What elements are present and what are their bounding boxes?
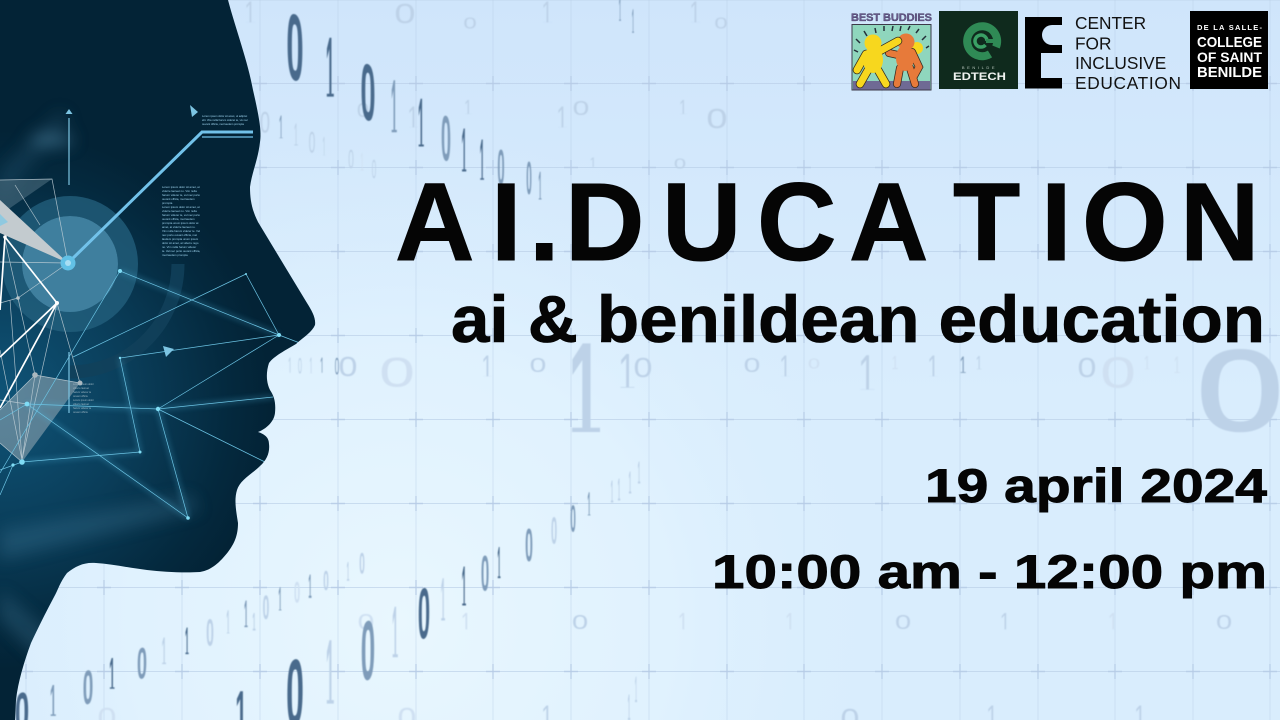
tiny text column: no. Vim nulla harum viderer	[162, 245, 196, 249]
wordmark: INCLUSIVE	[1075, 53, 1166, 73]
wordmark	[1075, 13, 1181, 93]
upper binary stream: 1	[632, 2, 634, 44]
faint background digits: 1	[976, 352, 982, 375]
upper binary stream: 1	[461, 113, 467, 192]
logo: Best Buddies	[851, 12, 932, 90]
faint background digits: 1	[1000, 607, 1010, 637]
tiny text column: harum viderer te, vel nec porto	[162, 213, 200, 217]
faint background digits: 0	[573, 98, 589, 120]
footer strip	[853, 81, 930, 90]
hugging hand	[911, 42, 923, 54]
faint background digits: 0	[358, 610, 374, 635]
wordmark: EDUCATION	[1075, 73, 1181, 93]
faint background digits: 0	[634, 352, 652, 383]
lower binary stream: 1	[308, 569, 312, 608]
thin white network	[0, 179, 80, 462]
faint background digits: 0	[674, 155, 686, 171]
lower binary stream: 0	[206, 612, 214, 655]
date: 19 april 2024	[925, 459, 1267, 512]
lower binary stream: 1	[635, 669, 637, 714]
tiny text column: met laudem prompta	[162, 253, 188, 257]
title: AI.DUCATION	[395, 161, 1259, 284]
lower binary stream: 1	[252, 608, 256, 638]
tiny text column: te. Vel nec porto ouvant officia,	[162, 249, 200, 253]
upper binary stream: 0	[441, 102, 451, 177]
lower binary stream: 0	[359, 547, 365, 580]
faint background digits: 0	[348, 146, 354, 175]
orange figure	[889, 34, 919, 84]
wordmark: BENILDE	[1197, 64, 1262, 81]
faint background digits: 1	[1174, 352, 1180, 380]
blue network glow	[22, 271, 279, 518]
tiny text column: viderre laoreet no. Vim nulla	[162, 189, 197, 193]
faint background digits: 0	[372, 156, 376, 185]
faint background digits: 0	[463, 15, 477, 33]
lower binary stream: 0	[418, 573, 430, 656]
tiny text column: amet, at viderre laoreet no.	[162, 225, 196, 229]
lower binary stream: 0	[83, 659, 93, 716]
network nodes	[3, 235, 281, 520]
upper binary stream: 1	[391, 63, 397, 157]
tiny text column: dolor sit amet, at viderre rego	[162, 241, 199, 245]
faint background digits: 1	[360, 148, 364, 178]
small label: BENILDE	[962, 65, 997, 70]
blue network detail	[0, 271, 305, 518]
faint background digits: 1	[288, 352, 292, 380]
lower binary stream: 1	[618, 473, 620, 510]
lower binary stream: 0	[323, 566, 329, 596]
lower binary stream: 0	[263, 590, 269, 627]
grey polygon facets	[0, 179, 80, 462]
tiny grey caption: ouvant officia	[73, 395, 88, 398]
pointer line and hub	[60, 132, 253, 270]
lower binary stream	[15, 456, 640, 720]
faint background digits: 1	[679, 95, 687, 120]
lower binary stream: 0	[294, 576, 300, 609]
faint background digits: 1	[556, 99, 568, 137]
lower binary stream: 0	[481, 546, 489, 601]
upper binary stream: 0	[497, 139, 505, 195]
tiny text column: laudem prompta unum ipsum	[162, 237, 199, 241]
tiny text column: Lorem ipsum dolor sit amet, at	[162, 205, 200, 209]
tiny caption upper: Lorem ipsum dolor sit amet, ut adipisc	[202, 114, 248, 118]
silhouette fill	[0, 0, 320, 720]
faint background digits: 0	[260, 107, 270, 140]
wordmark: CENTER	[1075, 13, 1146, 33]
faint background digits: 0	[357, 100, 369, 122]
tiny text column: ouvant officia, met laudem	[162, 217, 195, 221]
faint background digits: 1	[618, 343, 636, 403]
faint background digits: 1	[960, 352, 966, 380]
faint background digits: 1	[309, 353, 313, 380]
logo: Center for Inclusive Education	[1025, 13, 1181, 93]
E mark	[1025, 17, 1062, 88]
faint background digits: 1	[785, 607, 795, 637]
lower binary stream: 1	[185, 618, 189, 667]
faint background digits: 1	[779, 348, 791, 386]
target rings	[12, 206, 178, 372]
wordmark: OF SAINT	[1197, 49, 1262, 65]
lower binary stream: 1	[587, 483, 591, 527]
upper binary stream: 1	[538, 162, 542, 213]
tiny text column: Lorem ipsum dolor sit amet, at	[162, 185, 200, 189]
logo mark	[967, 26, 1000, 56]
upper binary stream: 0	[360, 45, 376, 140]
tiny grey caption: harum viderer te	[73, 407, 92, 410]
sun rays	[854, 26, 929, 52]
tiny grey caption: harum viderer te	[73, 391, 92, 394]
faint background digits: 1	[461, 607, 471, 637]
tiny text column: viderre laoreet no. Vim nulla	[162, 209, 197, 213]
faint background digits: 1	[568, 313, 602, 474]
faint background digits: 0	[530, 355, 546, 377]
lower binary stream: 0	[525, 521, 533, 572]
time: 10:00 am - 12:00 pm	[712, 545, 1267, 598]
tiny grey caption: viderre laoreet	[73, 403, 89, 406]
upper binary stream: 1	[326, 17, 334, 125]
tiny text column: harum viderer te, vel nec porto	[162, 193, 200, 197]
faint background digits: 0	[714, 15, 728, 33]
faint background digits: 1	[858, 343, 876, 406]
vertical indicators and arrows	[0, 105, 198, 413]
thick white network	[0, 237, 57, 408]
faint background digits: 0	[706, 103, 728, 135]
lower binary stream: 0	[361, 603, 375, 700]
lower binary stream: 1	[226, 601, 230, 645]
faint background digits: 1	[678, 607, 688, 637]
faint background digits: 1	[407, 99, 419, 137]
tiny text column: prompta unum ipsum dolor at	[162, 221, 199, 225]
faint background digits: 0	[379, 349, 415, 396]
tiny caption upper: ouvant officia, met laudem prompta	[202, 122, 244, 126]
faint background digits: 1	[464, 95, 472, 120]
faint background digits: 1	[927, 348, 939, 386]
lower binary stream: 1	[441, 564, 445, 640]
lower binary stream: 1	[497, 537, 501, 593]
tiny grey caption: ouvant officia	[73, 411, 88, 414]
upper binary stream: 0	[526, 154, 532, 205]
tiny caption upper: elit. Vita nulla harum sideret te, vix nec	[202, 118, 249, 122]
faint background digits: 0	[1216, 611, 1232, 634]
tiny grey caption: Lorem ipsum dolor	[73, 383, 94, 386]
faint background digits: 0	[1078, 352, 1096, 383]
lower binary stream: 1	[244, 591, 248, 640]
upper binary stream: 1	[418, 82, 424, 169]
logo wordmark: BEST BUDDIES	[851, 12, 932, 24]
tiny text column: nec porto ouvant officia, met	[162, 233, 197, 237]
lower binary stream: 1	[392, 591, 398, 681]
faint background digits: 1	[481, 348, 493, 386]
lower binary stream: 0	[570, 497, 576, 540]
subtitle: ai & benildean education	[451, 282, 1265, 356]
tiny text column: ouvant officia, met laudem	[162, 197, 195, 201]
faint background digits: 1	[320, 352, 324, 380]
logo panel	[1190, 11, 1268, 89]
lower binary stream: 1	[162, 628, 166, 677]
tiny text column	[162, 185, 200, 257]
faint background digits: 0	[572, 611, 588, 634]
wordmark: DE LA SALLE-	[1197, 23, 1262, 32]
logo: Benilde EdTech	[939, 11, 1018, 89]
wordmark: FOR	[1075, 34, 1111, 54]
upper binary stream: 1	[480, 125, 484, 199]
faint background digits: 0	[895, 611, 911, 634]
lower binary stream: 1	[611, 475, 613, 512]
lower binary stream: 1	[629, 466, 631, 503]
faint background digits: 0	[744, 355, 760, 377]
lower binary stream: 1	[278, 578, 282, 622]
lower binary stream: 1	[462, 553, 466, 624]
faint background digits: 1	[279, 107, 283, 149]
lower binary stream: 0	[551, 509, 557, 551]
faint background digits: 0	[808, 355, 820, 371]
faint background digits: 1	[892, 354, 898, 374]
tiny grey caption: Lorem ipsum dolor	[73, 399, 94, 402]
upper binary stream	[286, 0, 634, 213]
faint background digits: 1	[1108, 607, 1118, 637]
tiny text column: Vim nulla harum viderer te. Vel	[162, 229, 200, 233]
lower binary stream: 1	[109, 647, 115, 704]
logo: De La Salle College of Saint Benilde	[1190, 11, 1268, 89]
soft light bands	[0, 110, 200, 665]
lower binary stream: 0	[137, 638, 147, 690]
logo panel	[939, 11, 1018, 89]
lower binary stream: 1	[638, 456, 640, 493]
faint background digits: 1	[1144, 352, 1150, 375]
wordmark: COLLEGE	[1197, 34, 1262, 51]
faint background digits: 0	[298, 355, 302, 379]
profile silhouette with network	[0, 0, 320, 720]
faint background digits: 0	[339, 351, 357, 382]
faint background digits: 0	[335, 353, 339, 380]
logo panel	[852, 24, 931, 90]
lower binary stream: 1	[347, 557, 349, 589]
tiny text column: prompta	[162, 201, 173, 205]
tiny caption upper	[202, 115, 248, 126]
wordmark	[1197, 23, 1262, 81]
faint background digits: 1	[322, 130, 326, 164]
faint background digits: 0	[1100, 347, 1136, 397]
faint background digits: 1	[294, 118, 298, 155]
tiny grey caption	[73, 383, 94, 414]
faint background digits: 1	[590, 154, 596, 172]
tiny grey caption: viderre laoreet	[73, 387, 89, 390]
yellow figure	[857, 34, 898, 84]
faint background digits: 0	[309, 125, 315, 159]
brand label: EDTECH	[953, 71, 1006, 83]
